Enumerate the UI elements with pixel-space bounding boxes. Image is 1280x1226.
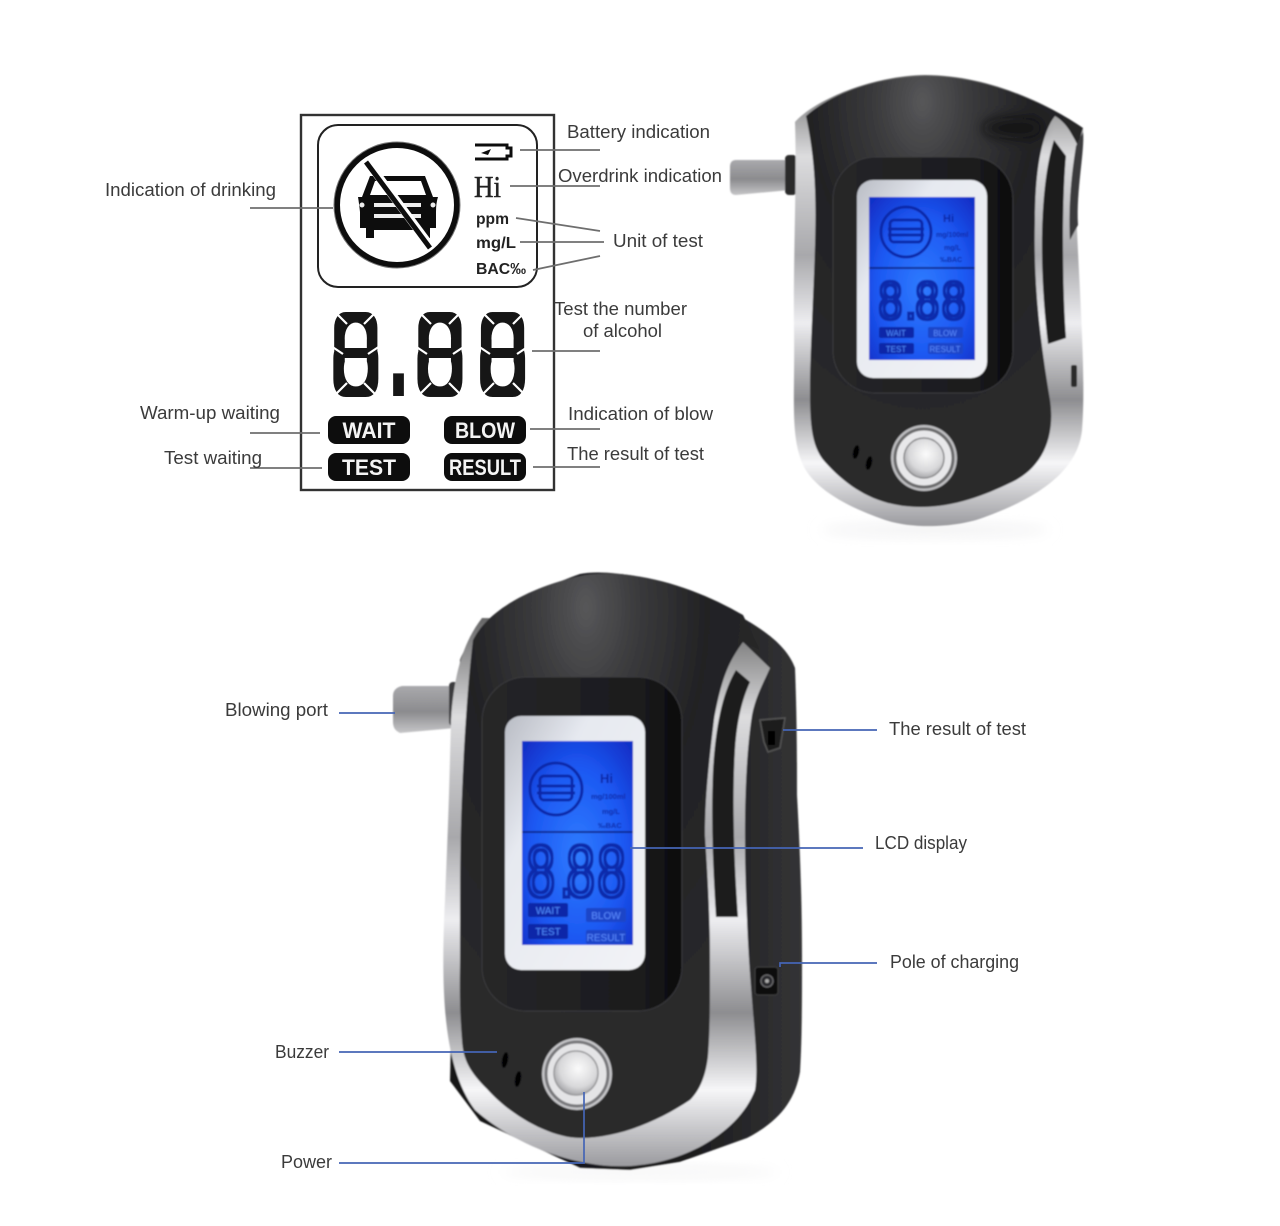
blue LCD screen: Hi [943,213,954,225]
silver display surround [505,716,645,970]
label: Buzzer: Buzzer [275,1042,329,1062]
chrome front shell [443,618,770,1166]
blue LCD screen: mg/L [602,807,620,816]
label: Pole of charging [780,952,1019,972]
face black reflection [982,118,1042,138]
chrome body [794,75,1083,526]
Hi indicator: Hi [474,169,501,204]
label: Overdrink indication: Overdrink indication [558,166,722,186]
TEST badge: TEST [342,455,397,480]
blue LCD screen: BLOW [933,329,957,338]
blue LCD screen: mg/L [944,245,961,252]
label: The result of test: The result of test [567,444,704,464]
power button [542,1038,612,1110]
unit BAC: BAC‰ [476,261,526,278]
black face [806,76,1083,507]
digits 8.88: 8 [341,303,371,406]
label: Warm-up waiting: Warm-up waiting [140,403,280,423]
right band reflection [712,670,750,917]
icon: battery [475,145,511,159]
label: Test waiting: Test waiting [164,448,262,468]
blue LCD screen: WAIT [536,906,560,917]
outer LCD frame [301,115,554,490]
dark side body [450,573,802,1170]
blue LCD screen: BLOW [591,911,621,922]
TEST badge [328,453,410,481]
blue LCD screen: Hi [600,771,613,786]
buzzer slits [501,1052,522,1087]
label: Test the number of alcohol: Test the number [554,299,687,319]
blue LCD screen [869,197,975,360]
icon: no drinking and driving car [334,142,460,268]
blue LCD screen: RESULT [930,345,961,354]
label: Unit of test: Unit of test [613,231,703,251]
blue LCD screen [522,741,633,945]
label: Pole of charging: Pole of charging [890,952,1019,972]
WAIT badge [328,416,410,444]
floor shadow [500,1168,780,1176]
silver display surround [857,180,987,378]
lanyard hole [760,718,785,752]
right edge dark strip [1069,132,1083,240]
unit ppm: ppm [476,211,509,228]
BLOW badge: BLOW [455,418,515,443]
blue LCD screen: mg/100ml [591,792,626,801]
charging jack [755,967,778,995]
label: Battery indication: Battery indication [567,122,710,142]
label: LCD display: LCD display [875,833,967,853]
blue LCD screen: TEST [886,345,906,354]
panel: lower tester photo [393,573,802,1176]
blue LCD screen: 8.88 [878,272,966,331]
buzzer slits [852,445,873,470]
digits 8.88: . [388,259,409,429]
blowing port [730,155,797,195]
unit mg/L: mg/L [476,235,516,252]
blue LCD screen: mg/100ml [936,232,968,239]
right band reflection [1042,140,1066,344]
side jack [1071,365,1077,387]
blue LCD screen: ‰BAC [598,821,622,830]
label: The result of test (lanyard): The result of test [889,719,1026,739]
label: Unit of test [516,218,703,270]
blue LCD screen: TEST [535,927,561,938]
black face [460,574,760,1138]
blue LCD screen: RESULT [587,933,625,944]
photo labels and leader lines [225,700,1026,1172]
label: Indication of drinking: Indication of drinking [105,180,276,200]
legend labels and leader lines [105,122,722,468]
label: Indication of blow: Indication of blow [568,404,714,424]
RESULT badge: RESULT [449,455,521,480]
display bezel [833,157,1013,393]
label: Blowing port: Blowing port [225,700,328,720]
label: Test the number of alcohol: of alcohol [583,321,662,341]
WAIT badge: WAIT [342,418,396,443]
digits 8.88 [331,259,529,429]
upper indicator panel [318,125,537,287]
blue LCD screen: WAIT [886,329,906,338]
label: Test the number of alcohol [532,299,687,351]
power button [891,425,957,491]
blue LCD screen: 8.88 [526,830,626,913]
label: Power: Power [281,1152,332,1172]
floor shadow [820,525,1050,535]
blue LCD screen: ‰BAC [940,257,962,264]
display bezel [482,677,682,1011]
label: Power [281,1092,584,1172]
panel: LCD legend diagram [301,115,554,490]
panel: upper tester photo [730,75,1083,535]
blowing port [393,682,461,733]
digits 8.88: 88 [425,303,517,406]
